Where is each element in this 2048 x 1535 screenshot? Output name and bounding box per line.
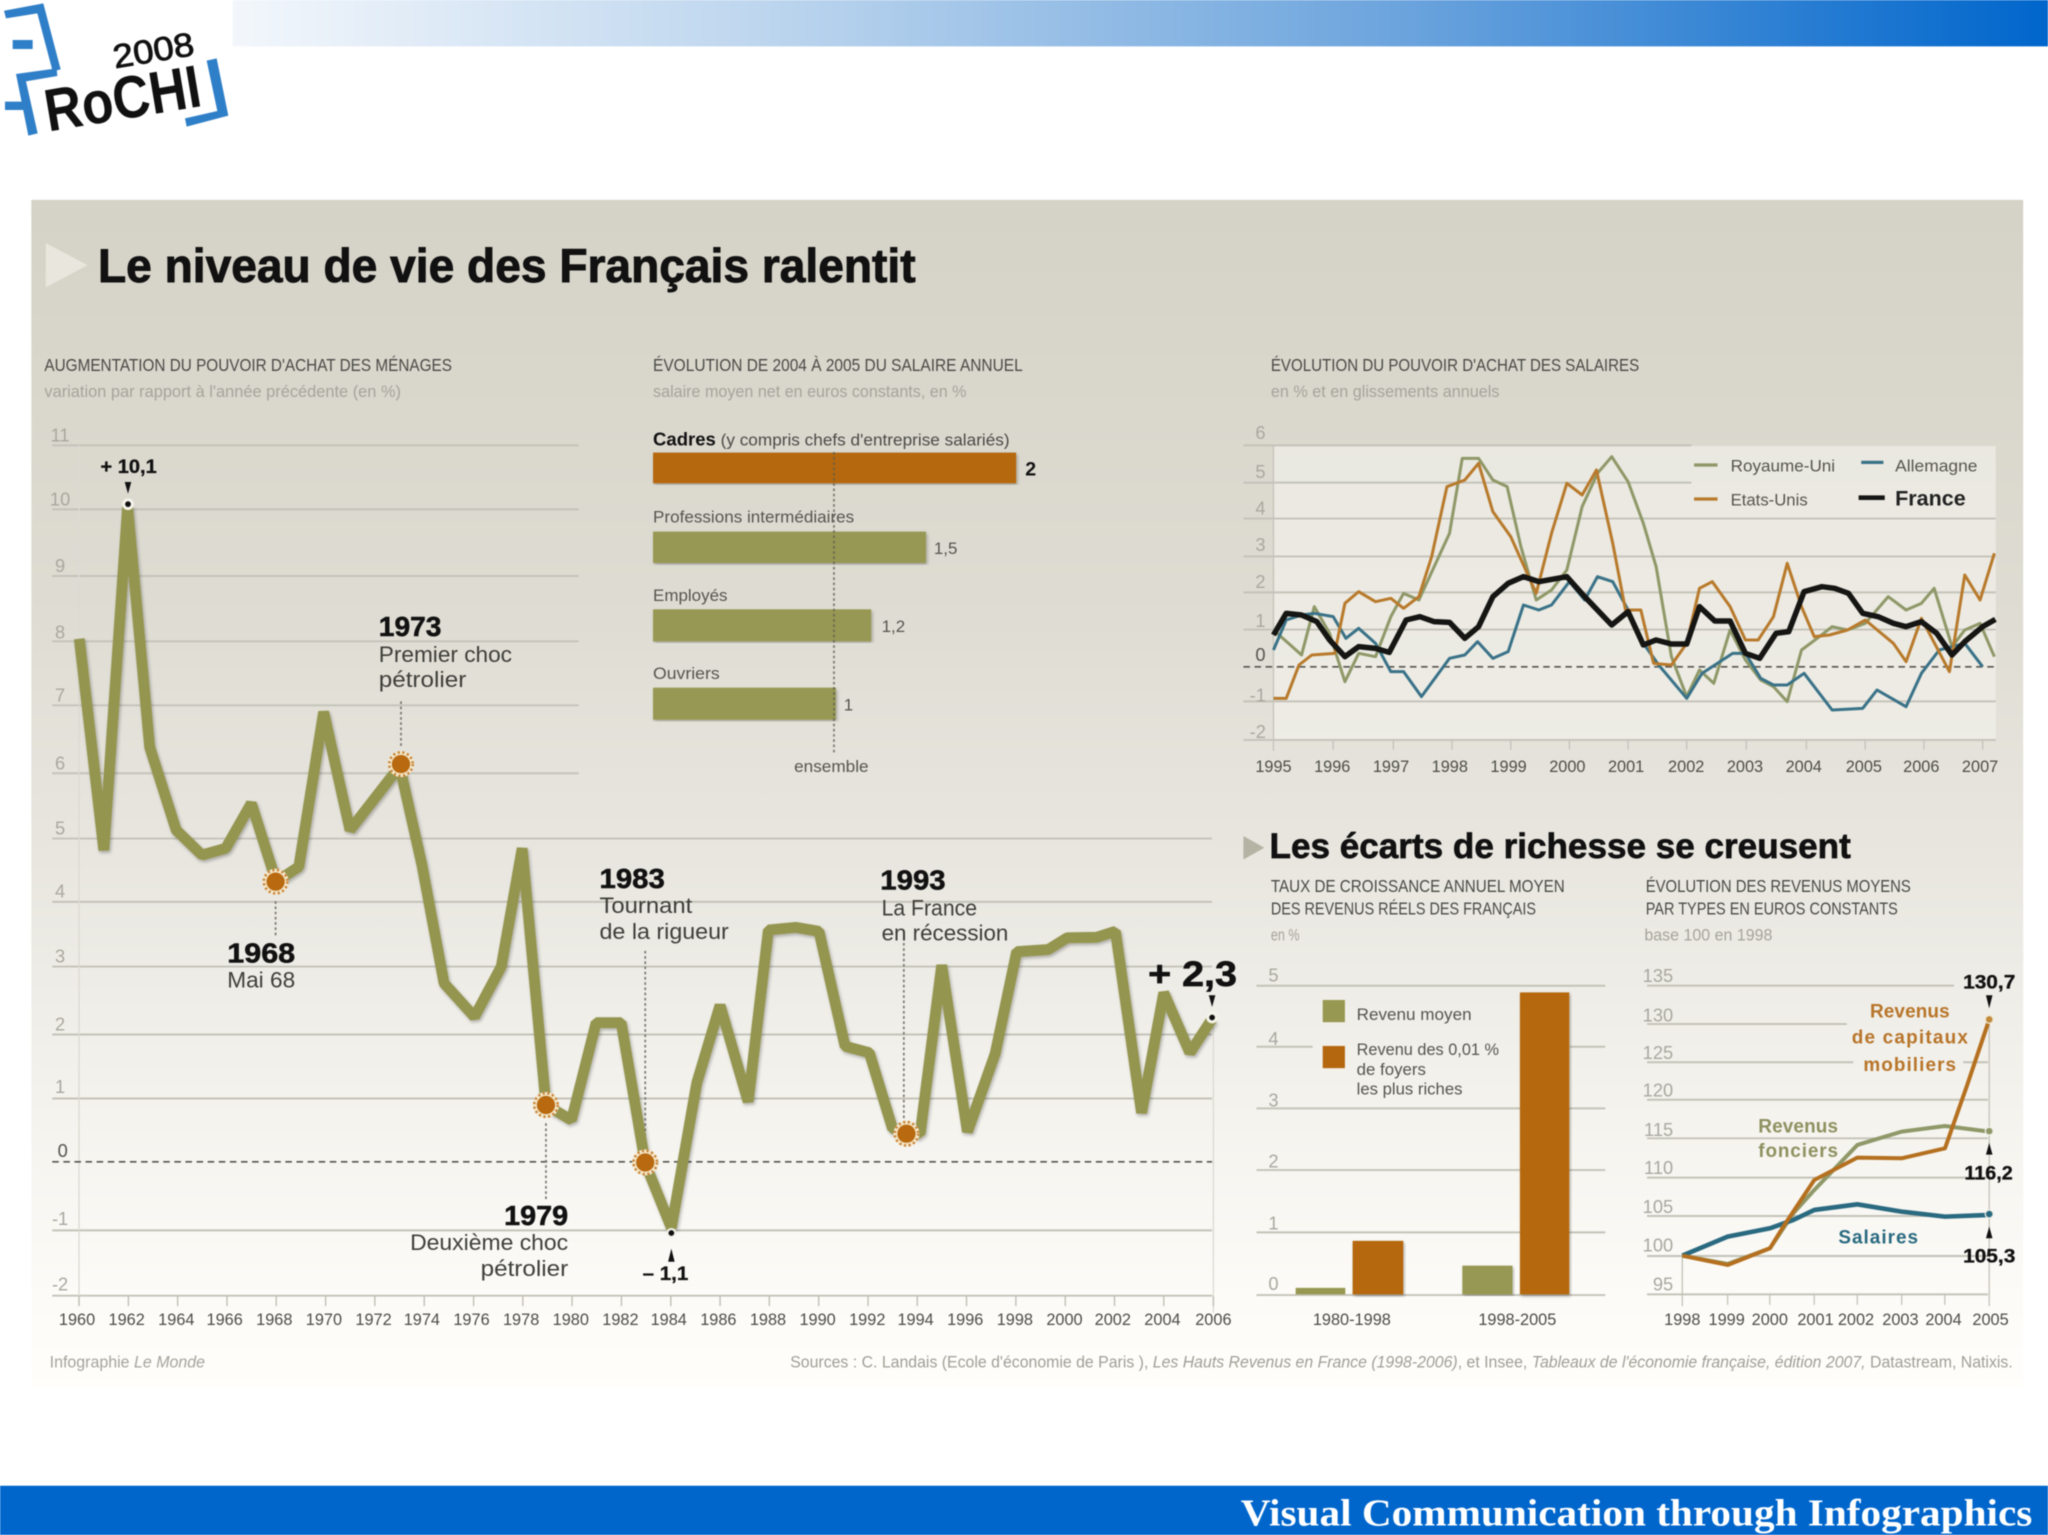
x axis labels: 2002 [1838, 1311, 1874, 1329]
callout: 1979: 1979 [504, 1200, 568, 1231]
y axis labels: 100 [1643, 1234, 1673, 1255]
legend: revenus: Revenu des 0,01 % [1357, 1040, 1499, 1059]
line: Allemagne [1273, 577, 1983, 710]
event marker 1979 [533, 1092, 559, 1118]
callout: 1973: Premier choc [379, 642, 512, 667]
logo: RoCHI 2008 [4, 3, 228, 145]
x axis labels: 1996 [1314, 758, 1350, 776]
y axis labels: 3 [55, 946, 65, 967]
heading: pouvoir d'achat: variation par rapport à l'année précédente (en %) [44, 382, 401, 401]
bar: employés [653, 586, 905, 641]
x axis labels: 2004 [1144, 1311, 1181, 1329]
legend: Allemagne [1895, 457, 1977, 476]
line series [1682, 1019, 1989, 1265]
y axis labels: 130 [1643, 1004, 1673, 1025]
callout: 1968: 1968 [227, 938, 295, 969]
y axis labels: 120 [1643, 1080, 1673, 1101]
line: Royaume-Uni [1273, 457, 1994, 702]
event marker 1983 [632, 1149, 658, 1176]
y axis labels: 8 [55, 622, 65, 643]
legend: Etats-Unis [1731, 490, 1808, 509]
heading: salaires [1271, 355, 1639, 401]
y axis labels: 2 [55, 1014, 65, 1035]
bar: professions intermédiaires [653, 507, 957, 563]
bar: ouvriers: 1 [844, 696, 853, 715]
y axis labels [1643, 965, 1673, 1294]
legend [1694, 457, 1977, 510]
legend: revenus: de foyers [1357, 1060, 1426, 1079]
bar: professions intermédiaires: 1,5 [934, 539, 957, 558]
y axis labels: -1 [1250, 684, 1266, 705]
y axis labels: 125 [1643, 1042, 1673, 1063]
y axis labels: 2 [1255, 571, 1265, 592]
y axis labels: 5 [55, 818, 65, 839]
bar: cadres: 2 [1025, 458, 1036, 480]
x axis labels: 1996 [947, 1311, 983, 1329]
y axis labels: 0 [1268, 1273, 1279, 1294]
heading: taux de croissance: en % [1271, 925, 1300, 944]
y axis labels: 6 [1255, 422, 1265, 443]
heading: taux de croissance: DES REVENUS RÉELS DES FRANÇAIS [1271, 898, 1536, 918]
top gradient bar [232, 0, 2048, 46]
callout: + 10,1 [101, 456, 157, 510]
x axis labels: 2002 [1095, 1311, 1131, 1329]
x axis labels: 2005 [1846, 758, 1882, 776]
panel background [31, 200, 2023, 1387]
label: salaires: Salaires [1838, 1227, 1918, 1248]
chart: salaire annuel bars [653, 355, 1036, 776]
callout: 1993 [880, 864, 1008, 945]
y axis labels: 115 [1644, 1119, 1673, 1140]
x axis labels: 2000 [1046, 1311, 1083, 1329]
x axis labels: 1978 [503, 1311, 539, 1329]
x axis labels: 2006 [1195, 1311, 1232, 1329]
bars 1998-2005: 1998-2005 [1478, 1311, 1556, 1329]
value: 130,7 [1963, 971, 2015, 1023]
x axis labels: 1990 [799, 1311, 836, 1329]
value: 105,3: 105,3 [1963, 1246, 2015, 1268]
y axis labels: 5 [1255, 461, 1265, 482]
y axis labels: 1 [55, 1076, 65, 1097]
y axis labels: 9 [55, 555, 65, 576]
callout: 1968 [227, 938, 295, 992]
y axis labels: 7 [55, 684, 65, 705]
bars 1980-1998: 1980-1998 [1313, 1311, 1391, 1329]
callout: 1973 [379, 611, 512, 692]
heading: salaire annuel: salaire moyen net en euros constants, en % [653, 382, 967, 401]
label: revenus de capitaux mobiliers [1852, 1001, 1968, 1076]
heading: revenus moyens: ÉVOLUTION DES REVENUS MOYENS [1646, 876, 1911, 896]
line: revenus fonciers [1682, 1126, 1989, 1264]
y axis labels: 0 [58, 1140, 68, 1161]
dotted leader lines [276, 701, 904, 1199]
line series [1273, 457, 1995, 710]
line: capitaux mobiliers [1682, 1019, 1989, 1265]
x axis labels [59, 1311, 1232, 1329]
heading: salaires: ÉVOLUTION DU POUVOIR D'ACHAT DES SALAIRES [1271, 355, 1639, 375]
title with arrow: Le niveau de vie des Français ralentit [98, 239, 916, 292]
heading: pouvoir d'achat [44, 355, 452, 401]
y axis labels: -2 [52, 1273, 68, 1294]
y axis labels: 3 [1268, 1089, 1279, 1110]
y axis labels: 2 [1268, 1151, 1279, 1172]
y axis labels: 95 [1653, 1273, 1673, 1294]
y axis labels [1250, 422, 1266, 742]
event marker 1993 [893, 1121, 920, 1147]
x axis labels: 1982 [602, 1311, 639, 1329]
legend: Royaume-Uni [1731, 457, 1835, 476]
y axis labels: -2 [1250, 721, 1266, 742]
y axis labels: 4 [1255, 498, 1265, 519]
y axis labels: 0 [1255, 644, 1265, 665]
x axis labels: 1998 [1664, 1311, 1700, 1329]
x axis labels: 2001 [1797, 1311, 1834, 1329]
callout: 1993: 1993 [880, 864, 946, 895]
x axis labels: 1997 [1373, 758, 1409, 776]
x axis labels: 1994 [897, 1311, 934, 1329]
x axis labels [1664, 1311, 2009, 1329]
sources: Sources : C. Landais (Ecole d'économie de Paris ), Les Hauts Revenus en France (1998-2006), et Insee, Tableaux de l'économie française, édition 2007, Datastream, Natixis. [790, 1353, 2013, 1372]
x axis labels: 1988 [750, 1311, 786, 1329]
bars 1998-2005 [1462, 992, 1569, 1329]
event marker 1973 [388, 751, 414, 777]
value: 116,2: 116,2 [1964, 1162, 2013, 1184]
x axis labels: 1966 [207, 1311, 243, 1329]
x axis labels: 2007 [1962, 758, 1998, 776]
callout: + 10,1: + 10,1 [101, 456, 157, 478]
x axis labels: 2000 [1752, 1311, 1788, 1329]
heading: taux de croissance [1271, 876, 1565, 944]
subheading with arrow: Les écarts de richesse se creusent [1270, 827, 1851, 866]
label: revenus fonciers: fonciers [1758, 1141, 1838, 1162]
callout: 1993: La France [882, 896, 977, 921]
y axis labels: 1 [1255, 610, 1265, 631]
heading: salaire annuel: ÉVOLUTION DE 2004 À 2005 DU SALAIRE ANNUEL [653, 355, 1023, 375]
label: revenus de capitaux mobiliers: mobiliers [1863, 1055, 1956, 1076]
heading: revenus moyens [1644, 876, 1911, 944]
y axis labels: 6 [55, 752, 65, 773]
label: revenus fonciers [1758, 1116, 1838, 1162]
x axis labels: 2000 [1549, 758, 1585, 776]
bars 1980-1998 [1296, 1241, 1403, 1329]
x axis labels: 1995 [1255, 758, 1292, 776]
x axis labels: 1974 [404, 1311, 440, 1329]
callout: 1973: pétrolier [379, 667, 467, 692]
bar: employés: Employés [653, 586, 728, 605]
bar: cadres: Cadres (y compris chefs d'entreprise salariés) [653, 428, 1010, 449]
callout: 1979: pétrolier [481, 1256, 569, 1281]
x axis labels: 1999 [1490, 758, 1527, 776]
x axis labels: 1970 [306, 1311, 342, 1329]
x axis labels: 2005 [1972, 1311, 2009, 1329]
x axis labels: 1998 [1432, 758, 1468, 776]
value: 105,3 [1963, 1210, 2015, 1268]
reference line: ensemble: ensemble [794, 757, 869, 776]
legend: revenus: Revenu moyen [1357, 1005, 1472, 1024]
x axis labels: 1976 [453, 1311, 490, 1329]
x axis labels: 2001 [1608, 758, 1644, 776]
callout: 1968: Mai 68 [227, 967, 295, 992]
logo: RoCHI 2008: RoCHI [39, 52, 206, 145]
chart: pouvoir d'achat des salaires [1243, 355, 1998, 776]
line: Etats-Unis [1273, 463, 1994, 698]
value: 130,7: 130,7 [1963, 971, 2015, 993]
chart: taux de croissance [1256, 876, 1605, 1329]
y axis labels: 4 [55, 880, 65, 901]
callout: 1979: Deuxième choc [410, 1230, 568, 1255]
chart: revenus moyens par types [1643, 876, 2015, 1329]
y axis labels: 3 [1255, 534, 1265, 555]
event marker 1968 [263, 869, 289, 895]
x axis labels: 2002 [1668, 758, 1704, 776]
x axis labels: 1999 [1709, 1311, 1745, 1329]
line: France [1273, 577, 1995, 658]
callout: + 2,3: + 2,3 [1148, 955, 1237, 994]
bottom bar with caption [0, 1486, 2048, 1535]
y axis labels: 5 [1268, 965, 1279, 986]
x axis labels: 2004 [1925, 1311, 1962, 1329]
x axis labels: 1962 [109, 1311, 145, 1329]
bar: ouvriers [653, 664, 853, 720]
bottom bar with caption: Visual Communication through Infographics [1241, 1493, 2032, 1535]
x axis labels: 1984 [651, 1311, 687, 1329]
legend: France [1895, 487, 1966, 510]
x axis labels: 1968 [256, 1311, 292, 1329]
heading: revenus moyens: PAR TYPES EN EUROS CONSTANTS [1646, 898, 1898, 918]
callout: 1983 [600, 863, 729, 944]
logo: RoCHI 2008: 2008 [110, 26, 197, 76]
bar: professions intermédiaires: Professions intermédiaires [653, 507, 854, 526]
label: revenus de capitaux mobiliers: Revenus [1870, 1001, 1950, 1022]
y axis labels: 4 [1268, 1028, 1279, 1049]
x axis labels: 2003 [1882, 1311, 1919, 1329]
callout: − 1,1: – 1,1 [643, 1263, 688, 1285]
y axis labels: 1 [1268, 1213, 1279, 1234]
legend: revenus: les plus riches [1357, 1080, 1462, 1099]
label: revenus fonciers: Revenus [1758, 1116, 1838, 1137]
heading: salaire annuel [653, 355, 1023, 401]
callout: − 1,1 [643, 1228, 688, 1285]
main data line [79, 507, 1212, 1228]
heading: pouvoir d'achat: AUGMENTATION DU POUVOIR D'ACHAT DES MÉNAGES [44, 355, 452, 375]
bar: employés: 1,2 [882, 617, 905, 636]
y axis labels: 10 [50, 488, 70, 509]
x axis labels: 1980 [553, 1311, 589, 1329]
x axis labels: 2004 [1786, 758, 1822, 776]
callout: 1973: 1973 [379, 611, 441, 642]
value: 116,2 [1964, 1127, 2013, 1184]
y axis labels: -1 [52, 1208, 68, 1229]
legend: revenus [1323, 1000, 1499, 1099]
y axis labels: 110 [1644, 1157, 1673, 1178]
x axis labels: 2003 [1727, 758, 1763, 776]
y axis labels: 105 [1643, 1196, 1673, 1217]
y axis labels [50, 424, 70, 1294]
line: salaires [1682, 1204, 1989, 1256]
callout: + 2,3 [1148, 955, 1237, 1023]
x axis labels: 2006 [1903, 758, 1939, 776]
x axis labels: 1992 [849, 1311, 885, 1329]
y axis labels [1268, 965, 1279, 1294]
x axis labels: 1986 [700, 1311, 737, 1329]
callout: 1983: de la rigueur [600, 919, 729, 944]
heading: taux de croissance: TAUX DE CROISSANCE ANNUEL MOYEN [1271, 876, 1565, 896]
bar: ouvriers: Ouvriers [653, 664, 720, 683]
credit: Infographie Le Monde [50, 1353, 205, 1372]
callout: 1983: Tournant [600, 893, 692, 918]
label: revenus de capitaux mobiliers: de capitaux [1852, 1028, 1968, 1049]
heading: salaires: en % et en glissements annuels [1271, 382, 1499, 401]
y axis labels: 11 [51, 424, 70, 445]
x axis labels [1255, 758, 1998, 776]
x axis labels: 1972 [355, 1311, 392, 1329]
callout: 1993: en récession [882, 920, 1008, 945]
bar: cadres [653, 428, 1036, 483]
x axis labels: 1964 [158, 1311, 194, 1329]
x axis labels: 1960 [59, 1311, 95, 1329]
chart: augmentation du pouvoir d'achat [44, 355, 1237, 1329]
callout: 1983: 1983 [600, 863, 665, 894]
y axis labels: 135 [1643, 965, 1673, 986]
heading: revenus moyens: base 100 en 1998 [1644, 925, 1772, 944]
callout: 1979 [410, 1200, 569, 1281]
x axis labels: 1998 [997, 1311, 1033, 1329]
